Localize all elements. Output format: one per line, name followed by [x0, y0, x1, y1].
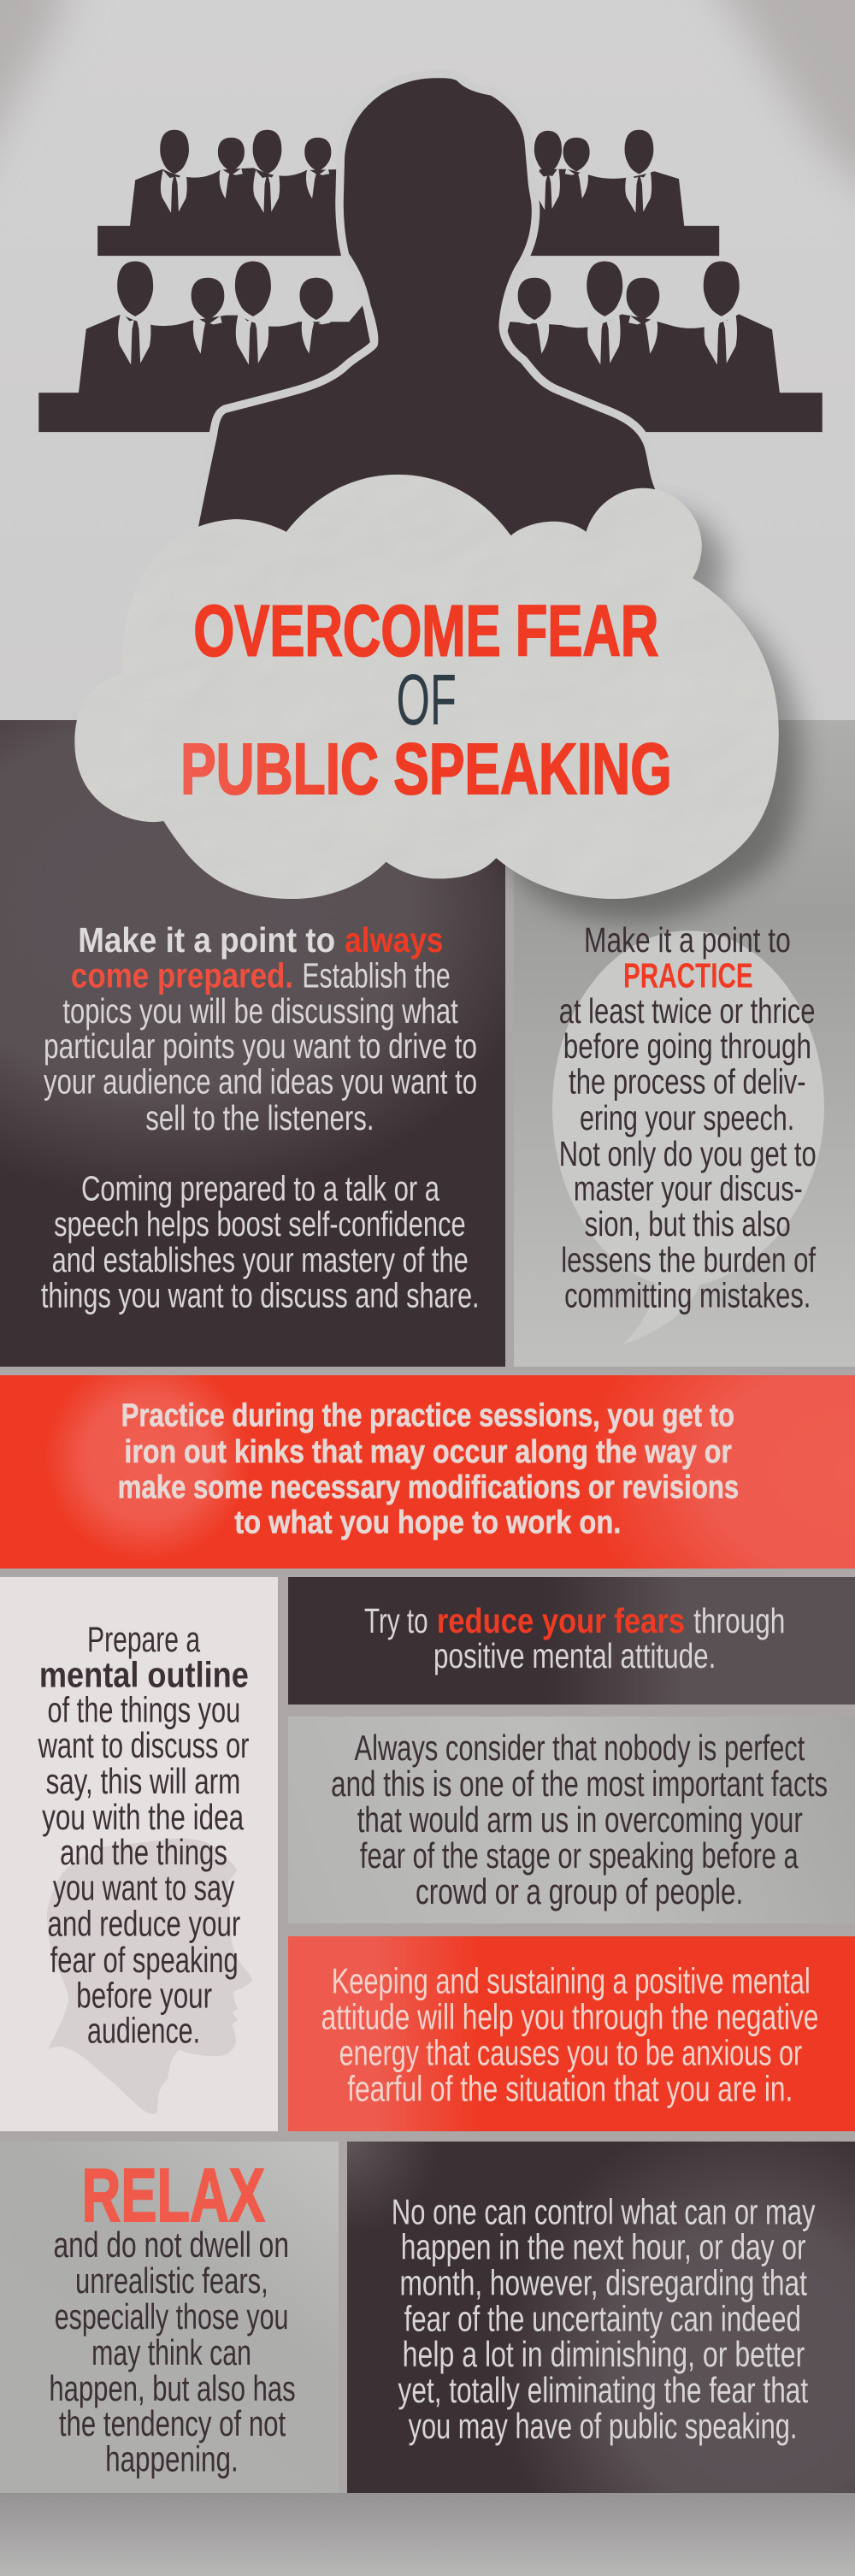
text: reduce your fears: Try to [364, 1601, 428, 1640]
text: always come prepared: Coming prepared to a talk or a [81, 1169, 439, 1208]
text: relax: unrealistic fears, [75, 2261, 268, 2301]
text: uncertainty [392, 2192, 816, 2446]
panel: reduce fears background [288, 1577, 855, 1705]
text: practice sessions: iron out kinks that may occur along the way or [124, 1433, 732, 1470]
text: always come prepared: Make it a point to [78, 920, 335, 960]
title: PUBLIC SPEAKING [180, 728, 672, 809]
text: practice sessions [118, 1397, 739, 1541]
text blocks, lower section [38, 1620, 828, 2479]
text: relax: especially those you [55, 2297, 288, 2337]
text: relax: RELAX [82, 2153, 265, 2237]
text: mental outline: fear of speaking [50, 1941, 239, 1980]
text: mental outline: audience. [87, 2011, 200, 2051]
panel: uncertainty background [347, 2142, 855, 2493]
text: mental outline: and the things [60, 1833, 227, 1872]
text: always come prepared: speech helps boost self-confidence [54, 1204, 466, 1244]
text: positive mental attitude [321, 1961, 818, 2108]
text: always come prepared: your audience and ideas you want to [44, 1062, 477, 1102]
text: nobody is perfect [331, 1728, 828, 1911]
text: reduce your fears: through [693, 1601, 785, 1640]
text: reduce your fears [364, 1601, 785, 1675]
text: always come prepared: sell to the listeners. [145, 1098, 374, 1137]
text: always come prepared: always [345, 920, 443, 960]
title [180, 590, 672, 809]
text: mental outline: of the things you [47, 1690, 240, 1730]
text: practice sessions: Practice during the practice sessions, you get to [121, 1397, 734, 1434]
text: relax: happen, but also has [49, 2369, 296, 2408]
text: relax: the tendency of not [59, 2404, 286, 2443]
text: always come prepared: and establishes your mastery of the [52, 1240, 469, 1279]
text: always come prepared: particular points you want to drive to [44, 1026, 477, 1066]
title: OVERCOME FEAR [193, 590, 658, 671]
panel: red practice band [0, 1375, 855, 1569]
panel: always come prepared background [0, 720, 505, 1367]
text: mental outline: mental outline [39, 1655, 249, 1694]
panel: positive attitude background [288, 1936, 855, 2131]
title: OF [397, 659, 457, 740]
audience: top right row [523, 130, 719, 256]
text: practice sessions: to what you hope to work on. [234, 1504, 621, 1541]
text: mental outline [38, 1620, 249, 2051]
panel: nobody is perfect background [288, 1716, 855, 1923]
text: relax [49, 2153, 296, 2479]
panel: relax background [0, 2142, 339, 2493]
text blocks, upper section [41, 920, 817, 1675]
panel: mental outline background [0, 1577, 278, 2131]
text: relax: and do not dwell on [54, 2225, 289, 2265]
illustration: speaker and audience [38, 78, 823, 600]
text: always come prepared: Establish the [302, 955, 451, 995]
text: always come prepared: come prepared. [71, 955, 293, 995]
audience: bottom right row [491, 261, 823, 432]
paper cloud [74, 475, 779, 899]
icon: head profile [47, 1838, 252, 2114]
speaker silhouette [186, 78, 670, 600]
cloud shadow [371, 511, 801, 921]
text: practice: PRACTICE [623, 955, 753, 995]
text: mental outline: you want to say [53, 1868, 235, 1907]
text: always come prepared: things you want to discuss and share. [41, 1276, 480, 1315]
text: mental outline: Prepare a [87, 1620, 200, 1659]
text: reduce your fears: positive mental attitude. [433, 1636, 716, 1675]
text: practice: sion, but this also [585, 1204, 791, 1244]
text: always come prepared [41, 920, 480, 1315]
text: relax: happening. [105, 2439, 239, 2479]
icon: speech bubble [552, 931, 824, 1344]
text: practice: Make it a point to [584, 920, 791, 960]
audience: top left row [97, 130, 349, 256]
text: mental outline: before your [76, 1976, 212, 2015]
text: mental outline: say, this will arm [46, 1762, 240, 1801]
text: reduce your fears: reduce your fears [437, 1601, 685, 1640]
panel: practice background [514, 720, 855, 1367]
text: nobody is perfect: crowd or a group of people. [416, 1872, 743, 1911]
text: always come prepared: topics you will be discussing what [62, 991, 458, 1031]
text: mental outline: want to discuss or [38, 1726, 249, 1765]
footer shadow band [0, 2493, 855, 2576]
text: practice [559, 920, 817, 1315]
audience: bottom left row [38, 261, 387, 432]
text: relax: may think can [91, 2333, 251, 2372]
text: mental outline: and reduce your [47, 1904, 240, 1943]
text: mental outline: you with the idea [42, 1798, 244, 1837]
